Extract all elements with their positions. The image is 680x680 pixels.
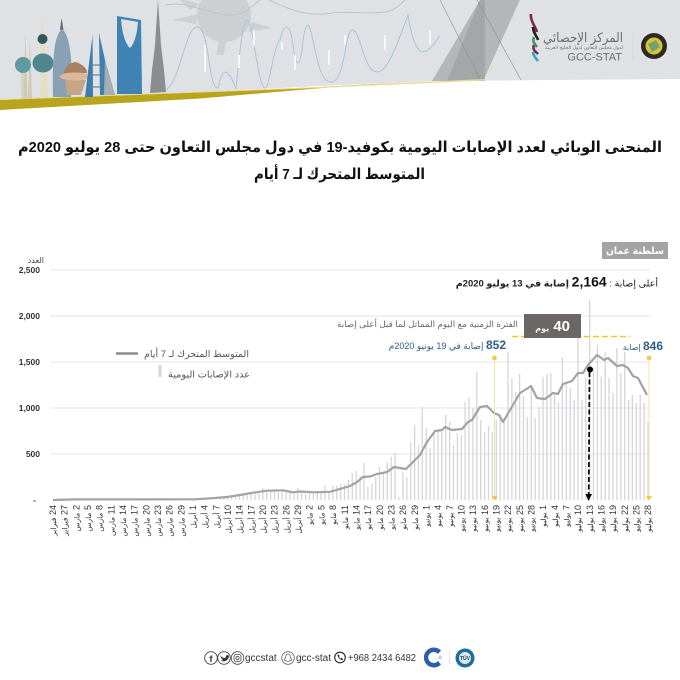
x axis labels: 20 مايو — [375, 505, 385, 531]
x axis labels: 4 يوليو — [550, 505, 560, 528]
handle gccstat: gccstat — [245, 653, 277, 664]
logo ribbon — [531, 14, 538, 61]
gridlines — [50, 270, 650, 454]
x axis labels: 28 يونيو — [526, 505, 536, 533]
x axis labels: 25 يوليو — [632, 505, 642, 533]
x axis labels: 14 مارس — [118, 505, 128, 537]
icon: instagram — [231, 652, 244, 664]
logo: TUV badge — [456, 648, 474, 668]
x axis labels: 11 مارس — [106, 505, 116, 536]
x axis labels: 16 يونيو — [480, 505, 490, 533]
logo: GCC certification C — [424, 647, 442, 668]
marker 19 June — [492, 356, 498, 500]
legend: moving average — [116, 347, 249, 360]
y axis labels: 2,500 — [19, 265, 40, 275]
phone number: +968 2434 6482 — [348, 653, 416, 664]
title — [18, 139, 662, 183]
icon: facebook: f — [209, 654, 213, 665]
x axis labels: 29 أبريل — [293, 505, 303, 534]
x axis labels: 4 أبريل — [200, 505, 210, 529]
x axis labels: 27 فبراير — [60, 505, 70, 537]
x axis labels: 1 أبريل — [188, 505, 198, 529]
x axis labels: 23 مايو — [386, 505, 396, 531]
white data ticks — [205, 30, 430, 72]
x axis labels: 28 يوليو — [643, 505, 653, 533]
legend: moving average: المتوسط المتحرك لـ 7 أيام — [144, 347, 249, 360]
846 annotation: 846 إصابة — [623, 339, 663, 353]
x axis labels: 10 يوليو — [573, 505, 583, 533]
x axis labels: 17 مايو — [363, 505, 373, 531]
logo Arabic subtitle: لدول مجلس التعاون لدول الخليج العربية — [545, 45, 623, 50]
x axis labels: 8 مارس — [95, 505, 105, 532]
wave lines — [165, 0, 440, 90]
x axis labels: 1 يوليو — [538, 505, 548, 528]
icon: whatsapp — [335, 652, 345, 663]
x axis labels: 10 يونيو — [456, 505, 466, 533]
statistical centre logo — [531, 14, 667, 64]
y axis labels — [19, 265, 40, 505]
dashed yellow span — [512, 336, 630, 338]
y axis labels: 2,000 — [19, 311, 40, 321]
icon: twitter — [218, 652, 230, 664]
x axis labels: 7 أبريل — [211, 505, 221, 529]
header banner — [0, 0, 680, 110]
moving average line — [53, 355, 647, 500]
GCC emblem — [641, 33, 667, 59]
x axis labels: 7 يونيو — [445, 505, 455, 528]
y axis labels: 1,500 — [19, 357, 40, 367]
x axis labels: 5 مايو — [316, 505, 326, 526]
x axis labels: 20 مارس — [141, 505, 151, 537]
x axis labels: 19 يونيو — [492, 505, 502, 533]
x axis labels: 26 مايو — [398, 505, 408, 531]
footer contact bar — [205, 647, 474, 668]
40 days callout: 40 يوم — [535, 318, 570, 335]
title line 1: المنحنى الوبائي لعدد الإصابات اليومية بكوفيد-19 في دول مجلس التعاون حتى 28 يوليو 2020م — [18, 139, 662, 156]
x axis labels: 24 فبراير — [48, 505, 58, 537]
x axis labels: 17 أبريل — [246, 505, 256, 534]
x axis labels: 16 يوليو — [596, 505, 606, 533]
852 annotation: 852 إصابة في 19 يونيو 2020م — [389, 338, 506, 352]
x axis labels: 17 مارس — [130, 505, 140, 537]
Oman label: سلطنة عمان — [606, 246, 664, 257]
y axis labels: 1,000 — [19, 403, 40, 413]
x axis labels: 2 مارس — [71, 505, 81, 532]
virus silhouette — [172, 0, 272, 55]
x axis labels: 22 يونيو — [503, 505, 513, 533]
x axis labels: 23 مارس — [153, 505, 163, 537]
y axis labels: - — [33, 495, 36, 505]
twisted tower — [53, 18, 72, 97]
handle gcc-stat: gcc-stat — [296, 653, 331, 664]
gold band — [0, 81, 432, 110]
x axis labels: 14 أبريل — [235, 505, 245, 534]
y axis title: العدد — [28, 256, 44, 265]
legend: daily cases: عدد الإصابات اليومية — [168, 370, 250, 380]
peak annotation text: أعلى إصابة : 2,164 إصابة في 13 يوليو 2020م — [456, 274, 658, 290]
Oman label — [602, 242, 668, 259]
icon: facebook — [205, 652, 217, 665]
x axis labels: 25 يونيو — [515, 505, 525, 533]
x axis labels: 23 أبريل — [270, 505, 280, 534]
x axis labels: 11 مايو — [340, 505, 350, 530]
x axis labels: 1 يونيو — [421, 505, 431, 528]
x axis labels: 22 يوليو — [620, 505, 630, 533]
logo English name: GCC-STAT — [567, 52, 622, 64]
daily cases bars — [220, 300, 648, 500]
grey chevron — [432, 0, 521, 81]
Burj Khalifa — [150, 0, 166, 93]
x axis labels: 5 مارس — [83, 505, 93, 532]
logo Arabic name: المركز الإحصائي — [543, 30, 623, 46]
logo: TUV badge: TÜV — [460, 655, 471, 662]
y axis labels: 500 — [26, 449, 40, 459]
x axis labels: 14 مايو — [351, 505, 361, 531]
x axis labels: 13 يوليو — [585, 505, 595, 533]
gold thin edge — [0, 79, 485, 100]
peak arrow — [586, 366, 593, 501]
dome building — [60, 62, 90, 95]
Kuwait towers — [15, 17, 54, 99]
x axis labels: 8 مايو — [328, 505, 338, 526]
Bahrain WTC — [85, 33, 115, 97]
period description: الفترة الزمنية مع اليوم المماثل لما قبل أعلى إصابة — [337, 318, 518, 330]
x axis labels: 29 مايو — [410, 505, 420, 531]
40 days callout — [524, 314, 581, 338]
x axis labels: 2 مايو — [305, 505, 315, 526]
Kingdom Tower — [117, 16, 142, 94]
icon: snapchat — [282, 652, 294, 664]
x axis labels — [48, 505, 653, 537]
legend: daily cases — [158, 365, 250, 380]
x axis labels: 26 مارس — [165, 505, 175, 537]
title line 2: المتوسط المتحرك لـ 7 أيام — [254, 164, 425, 183]
x axis labels: 7 يوليو — [562, 505, 572, 528]
x axis labels: 19 يوليو — [608, 505, 618, 533]
x axis labels: 4 يونيو — [433, 505, 443, 528]
x axis labels: 26 أبريل — [281, 505, 291, 534]
x axis labels: 10 أبريل — [223, 505, 233, 534]
marker 28 July — [646, 356, 652, 500]
x axis labels: 20 أبريل — [258, 505, 268, 534]
x axis labels: 29 مارس — [176, 505, 186, 537]
x axis labels: 13 يونيو — [468, 505, 478, 533]
